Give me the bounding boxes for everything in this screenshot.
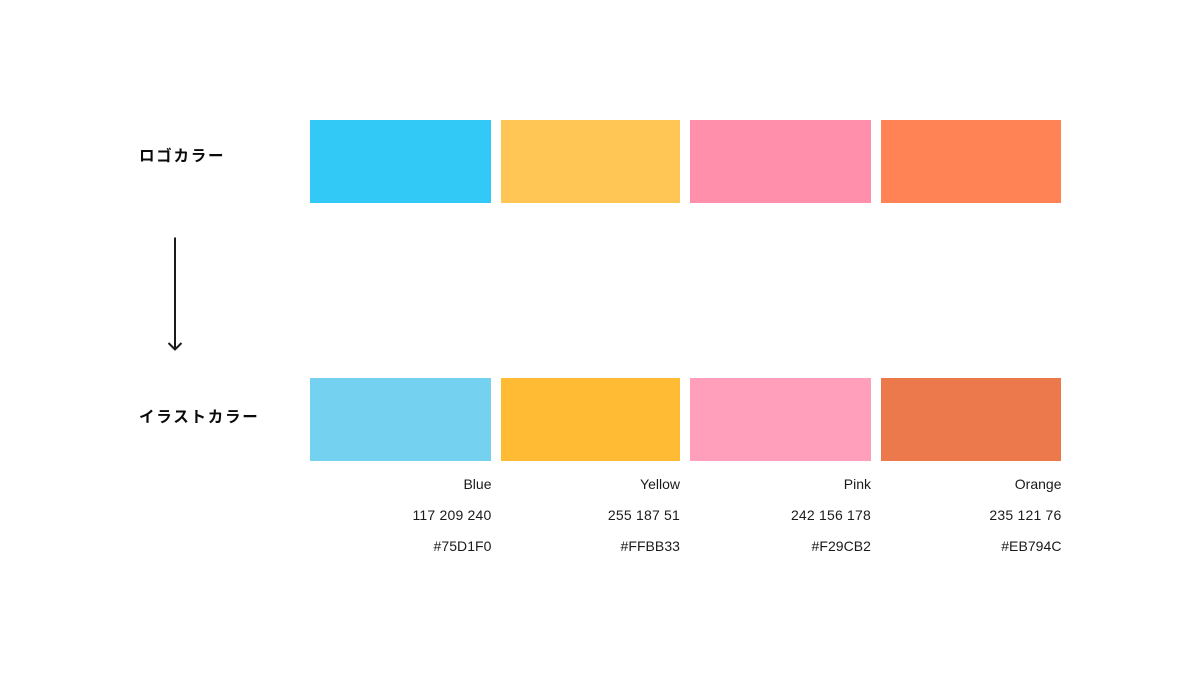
- swatch: illustration yellow: [501, 378, 680, 461]
- text block: pink values: Pink: [844, 476, 871, 492]
- text block: orange values: 235 121 76: [989, 506, 1062, 522]
- swatch: logo yellow: [501, 120, 680, 203]
- text block: orange values: #EB794C: [1001, 538, 1062, 554]
- panel: logo color swatches: [310, 120, 1061, 203]
- arrow: logo colors to illustration colors: [168, 238, 182, 351]
- text block: yellow values: [608, 476, 680, 554]
- panel: illustration color swatches: [310, 378, 1061, 461]
- text block: orange values: Orange: [1015, 476, 1062, 492]
- text block: blue values: 117 209 240: [412, 506, 492, 522]
- swatch: illustration orange: [881, 378, 1061, 461]
- heading: logo colors: ロゴカラー: [139, 144, 225, 166]
- text block: pink values: 242 156 178: [791, 506, 871, 522]
- text block: pink values: [791, 476, 871, 554]
- swatch: logo blue: [310, 120, 491, 203]
- swatch: logo orange: [881, 120, 1061, 203]
- text block: yellow values: 255 187 51: [608, 506, 680, 522]
- text block: blue values: Blue: [463, 476, 492, 492]
- text block: yellow values: #FFBB33: [620, 538, 680, 554]
- swatch: illustration pink: [690, 378, 871, 461]
- text block: blue values: [412, 476, 492, 554]
- text block: yellow values: Yellow: [640, 476, 680, 492]
- swatch: illustration blue: [310, 378, 491, 461]
- text block: pink values: #F29CB2: [812, 538, 871, 554]
- heading: illustration colors: イラストカラー: [139, 405, 259, 427]
- text block: orange values: [989, 476, 1062, 554]
- text block: blue values: #75D1F0: [434, 538, 492, 554]
- swatch: logo pink: [690, 120, 871, 203]
